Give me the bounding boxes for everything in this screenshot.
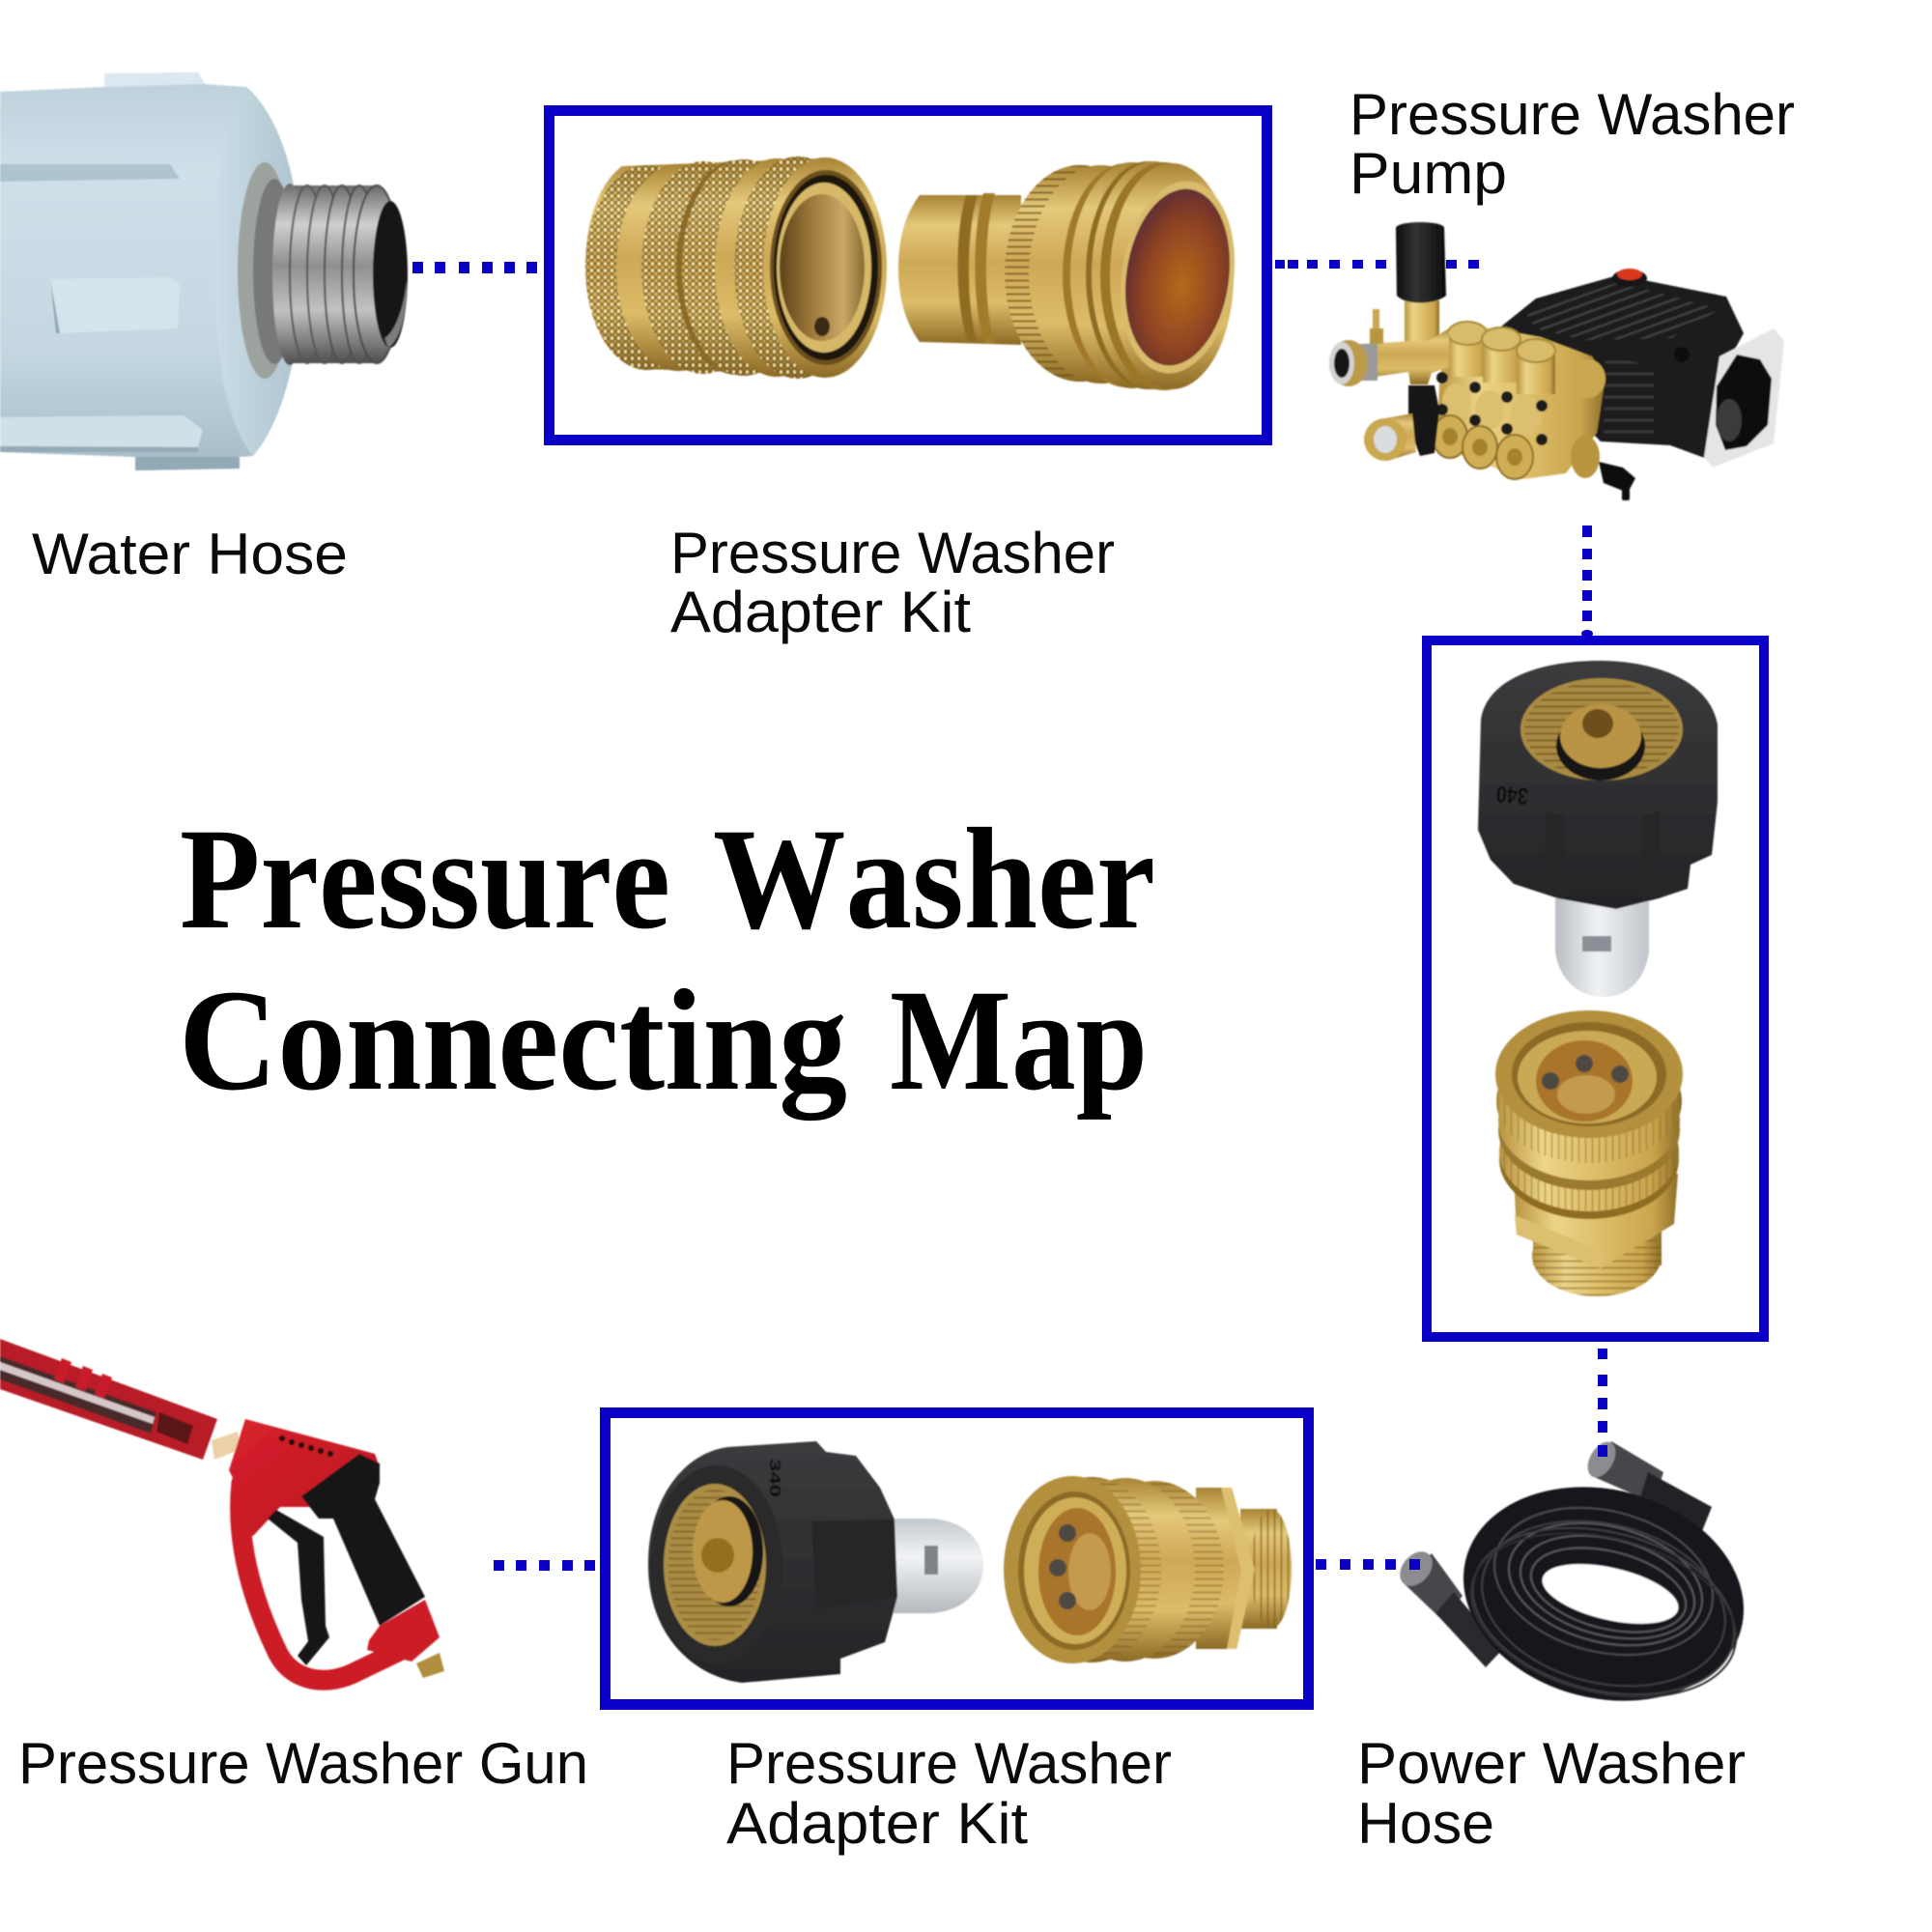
label: Pressure Washer Pump: Pressure Washer	[1350, 82, 1795, 147]
title: Washer	[713, 799, 1155, 959]
arrow: hose to lower adapter dotted line	[1316, 1559, 1420, 1570]
title: Pressure	[180, 799, 670, 959]
icon: brass male garden hose adapter	[898, 161, 1246, 390]
icon: red pressure washer gun with lance	[0, 1339, 444, 1680]
trigger	[268, 1510, 329, 1665]
pump crankcase	[1501, 276, 1744, 460]
label: Pressure Washer Pump: Pump	[1350, 141, 1507, 206]
label: Power Washer Hose: Hose	[1357, 1791, 1494, 1856]
frame	[605, 1412, 1308, 1704]
frame	[1427, 640, 1764, 1337]
label: Power Washer Hose	[1357, 1731, 1746, 1856]
arrow: pump to connector kit dotted line	[1581, 526, 1593, 638]
label: Pressure Washer Adapter Kit (bottom): Adapter Kit	[726, 1791, 1028, 1856]
trigger guard loop	[241, 1483, 413, 1680]
molded mark 340: 340	[766, 1459, 782, 1497]
title	[179, 799, 1155, 1121]
grip	[301, 1454, 425, 1626]
arrow: adapter to pump dotted connector	[1275, 260, 1479, 269]
panel: top adapter kit	[549, 110, 1267, 440]
icon: brass female quick coupler	[585, 156, 887, 379]
arrow: hose to adapter dotted connector	[412, 262, 537, 273]
brass fitting	[416, 1653, 444, 1678]
label: Pressure Washer Adapter Kit (top)	[670, 521, 1115, 644]
label: Pressure Washer Adapter Kit (top): Pressure Washer	[670, 521, 1115, 585]
frame	[549, 110, 1267, 440]
title: Map	[890, 960, 1148, 1121]
icon: black M22 nut with plug	[1478, 661, 1718, 997]
molded mark 340: 340	[1495, 781, 1529, 810]
label: Pressure Washer Adapter Kit (top): Adapter Kit	[670, 580, 971, 644]
icon: brass coupler, side view	[1004, 1476, 1292, 1663]
label: Pressure Washer Pump	[1350, 82, 1795, 206]
arrow: connector kit to hose dotted line	[1598, 1349, 1607, 1433]
icon: water hose fitting	[0, 72, 408, 470]
unloader valve	[1405, 300, 1439, 344]
icon: power washer hose coil	[1393, 1437, 1767, 1729]
label: Power Washer Hose: Power Washer	[1357, 1731, 1746, 1796]
arrow: adapter to gun dotted line	[494, 1560, 595, 1571]
title: Connecting	[179, 960, 847, 1121]
inlet fitting	[1385, 413, 1416, 461]
silver flange	[1704, 328, 1784, 468]
label: Pressure Washer Adapter Kit (bottom)	[726, 1731, 1172, 1856]
label: Pressure Washer Adapter Kit (bottom): Pressure Washer	[726, 1731, 1172, 1796]
panel: bottom adapter kit	[605, 1412, 1308, 1704]
icon: brass female quick coupler with thread	[1495, 1010, 1683, 1296]
label: Pressure Washer Gun: Pressure Washer Gun	[18, 1731, 588, 1796]
bottom drain valve	[1571, 436, 1600, 478]
label: Water Hose: Water Hose	[32, 522, 348, 586]
icon: pressure washer pump	[1329, 222, 1784, 500]
panel: right adapter kit	[1427, 640, 1764, 1337]
arrow: hose end vertical dot	[1598, 1445, 1607, 1457]
gun head	[229, 1419, 380, 1536]
lance	[0, 1339, 217, 1460]
brass pump head	[1436, 325, 1605, 479]
icon: black nut with plug, side view	[648, 1441, 983, 1683]
grip base	[367, 1600, 440, 1662]
